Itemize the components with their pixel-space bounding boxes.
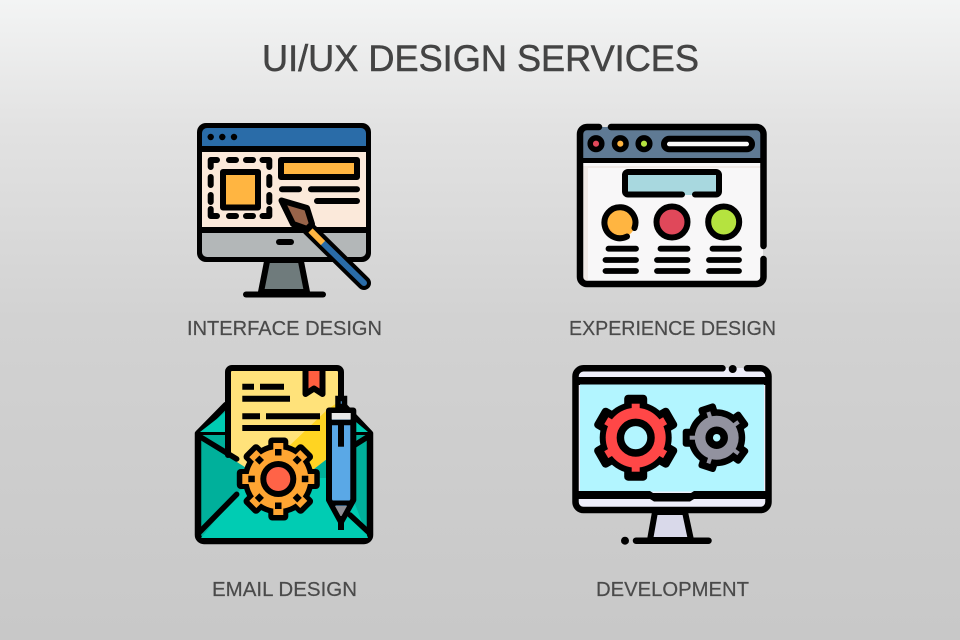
icon: red gear [593,395,679,481]
icon: browser window [580,127,764,284]
panel: interface design [187,123,382,340]
title: UI/UX DESIGN SERVICES [262,38,699,79]
label: interface design: INTERFACE DESIGN [187,318,382,340]
panel: development [575,365,769,601]
label: experience design: EXPERIENCE DESIGN [569,318,776,340]
icon: gray gear [683,403,749,473]
icon: blue pen [327,398,355,530]
icon: monitor with paintbrush [197,123,371,294]
panel: experience design [569,127,776,340]
icon: envelope with gear and pen [198,368,370,541]
icon: monitor with gears [575,365,769,545]
panel: email design [198,368,370,601]
label: email design: EMAIL DESIGN [212,579,357,601]
label: development: DEVELOPMENT [596,579,749,601]
icon: orange gear [237,438,320,520]
